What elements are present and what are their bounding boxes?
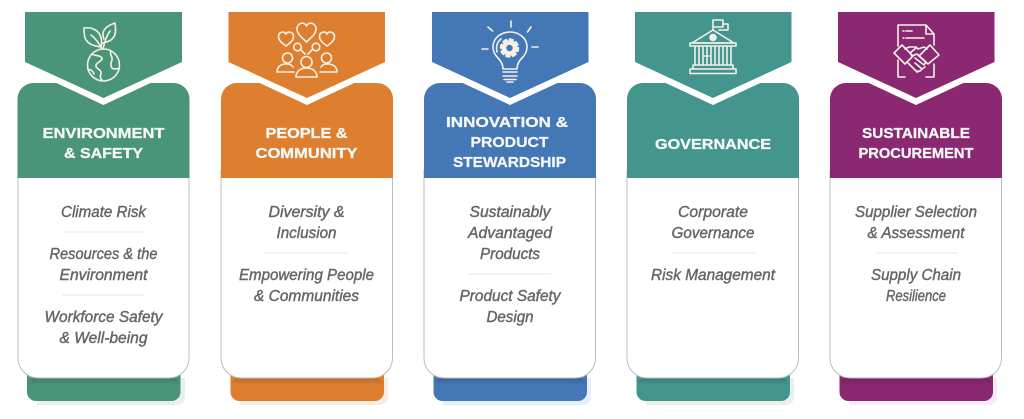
- panel: governance: Governance: [672, 225, 755, 242]
- header block: [221, 83, 393, 178]
- list items: Corporate: [678, 204, 748, 221]
- chevron gap: [20, 58, 187, 105]
- header block: [424, 83, 596, 178]
- panel: innovation & product stewardship: Product Safety: [460, 288, 562, 305]
- panel: people & community: COMMUNITY: [256, 145, 358, 162]
- bottom bar: [230, 370, 384, 401]
- panel: people & community: Inclusion: [276, 225, 336, 242]
- panel: governance: [627, 12, 799, 405]
- heading: ENVIRONMENT: [42, 125, 164, 142]
- icon: contract and handshake: [894, 25, 939, 77]
- panel: people & community: Empowering People: [239, 267, 374, 284]
- heading: PEOPLE &: [266, 125, 348, 142]
- heading: INNOVATION &: [446, 114, 568, 131]
- card body: [18, 170, 189, 378]
- bottom bar: [27, 370, 180, 401]
- icon: plant and globe: [84, 23, 120, 81]
- list items: Sustainably: [470, 204, 552, 221]
- card body: [627, 170, 798, 378]
- panel: innovation & product stewardship: Products: [480, 246, 540, 263]
- panel: sustainable procurement: Supply Chain: [871, 267, 961, 284]
- icon: government building: [690, 20, 736, 74]
- panel: innovation & product stewardship: [424, 12, 596, 405]
- icon: light bulb with gear: [482, 21, 538, 82]
- chevron gap: [223, 58, 391, 105]
- card body: [221, 170, 392, 378]
- header block: [627, 83, 799, 178]
- card body: [830, 170, 1002, 378]
- panel: environment & safety: & SAFETY: [64, 145, 143, 162]
- panel: sustainable procurement: [830, 12, 1002, 405]
- panel: environment & safety: Resources & the: [50, 246, 158, 263]
- header block: [18, 83, 190, 178]
- list items: Diversity &: [268, 204, 344, 221]
- icon: people and hearts: [277, 23, 337, 77]
- card body: [424, 170, 596, 378]
- panel: governance: Risk Management: [651, 267, 776, 284]
- panel: environment & safety: Workforce Safety: [44, 309, 164, 326]
- panel: sustainable procurement: PROCUREMENT: [858, 145, 974, 162]
- panel: sustainable procurement: Resilience: [886, 288, 946, 305]
- list items: Supplier Selection: [855, 204, 977, 221]
- banner: [25, 12, 182, 98]
- panel: environment & safety: [18, 12, 190, 405]
- panel: sustainable procurement: & Assessment: [868, 225, 965, 242]
- list items: Climate Risk: [61, 204, 147, 221]
- chevron gap: [832, 58, 1000, 105]
- bottom bar: [434, 370, 587, 401]
- banner: [635, 12, 792, 98]
- bottom bar: [840, 370, 993, 401]
- chevron gap: [426, 58, 594, 105]
- banner: [838, 12, 994, 98]
- panel: environment & safety: & Well-being: [60, 330, 148, 347]
- panel: innovation & product stewardship: Design: [486, 309, 534, 326]
- panel: people & community: & Communities: [254, 288, 359, 305]
- bottom bar: [636, 370, 790, 401]
- banner: [432, 12, 588, 98]
- heading: SUSTAINABLE: [862, 125, 970, 142]
- banner: [228, 12, 385, 98]
- heading: GOVERNANCE: [655, 136, 771, 153]
- header block: [830, 83, 1002, 178]
- panel: people & community: [221, 12, 393, 405]
- chevron gap: [629, 58, 797, 105]
- panel: innovation & product stewardship: PRODUCT: [470, 134, 548, 151]
- panel: innovation & product stewardship: STEWARDSHIP: [453, 154, 566, 171]
- panel: innovation & product stewardship: Advantaged: [467, 225, 553, 242]
- panel: environment & safety: Environment: [60, 267, 148, 284]
